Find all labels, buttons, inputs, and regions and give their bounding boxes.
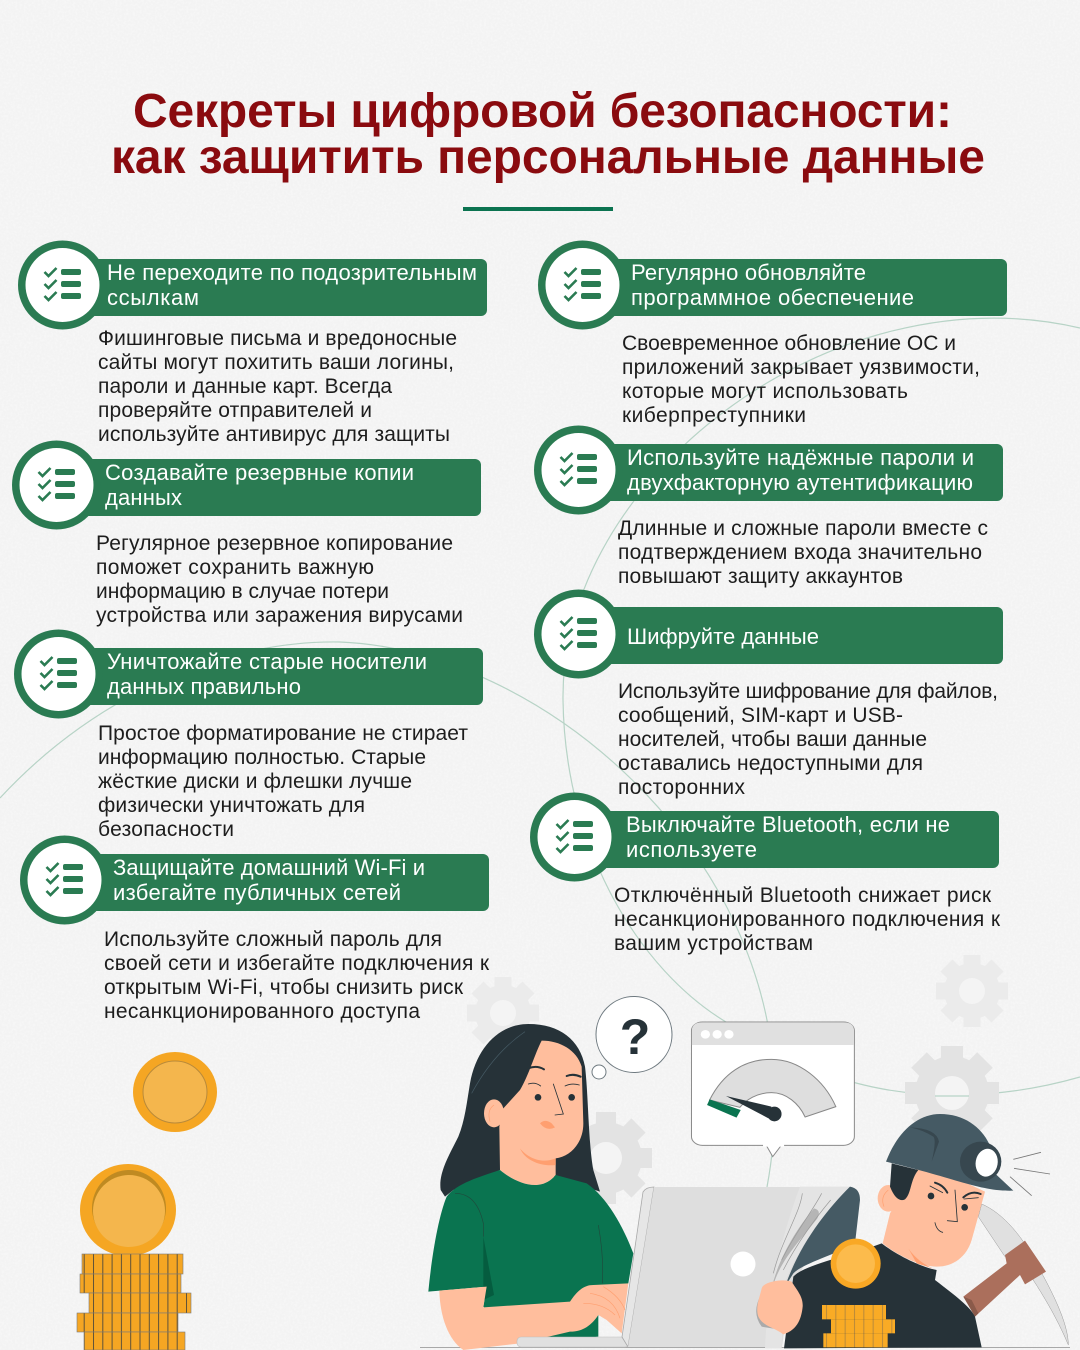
heading: Регулярно обновляйте — [631, 260, 866, 285]
body text — [98, 327, 457, 446]
body text: сообщений, SIM-карт и USB- — [618, 704, 903, 727]
body text: Простое форматирование не стирает — [98, 722, 468, 745]
body text: приложений закрывает уязвимости, — [622, 356, 980, 379]
icon: checklist — [18, 240, 107, 330]
heading — [113, 855, 425, 905]
panel: home Wi-Fi — [20, 836, 490, 1023]
heading: данных правильно — [107, 674, 301, 699]
body text: своей сети и избегайте подключения к — [104, 952, 490, 975]
body text: информацию в случае потери — [96, 580, 389, 603]
heading — [631, 260, 914, 310]
title: Секреты цифровой безопасности: — [133, 85, 952, 138]
icon: checklist — [12, 440, 101, 530]
heading — [627, 445, 974, 495]
illustration: miner — [756, 1114, 1068, 1348]
head — [878, 1163, 985, 1269]
heading: ссылкам — [107, 285, 199, 310]
torso — [784, 1243, 982, 1348]
coin stack — [77, 1254, 191, 1350]
icon: checklist — [20, 836, 109, 924]
body text: посторонних — [618, 776, 746, 799]
heading: данных — [105, 485, 182, 510]
heading: двухфакторную аутентификацию — [627, 470, 973, 495]
header bar — [56, 648, 483, 705]
body text: проверяйте отправителей и — [98, 399, 372, 422]
heading: избегайте публичных сетей — [113, 880, 401, 905]
body text — [622, 332, 980, 427]
panel: suspicious links — [18, 240, 487, 446]
panel: backups — [12, 440, 481, 627]
body text: Длинные и сложные пароли вместе с — [618, 517, 988, 540]
header bar — [54, 459, 481, 516]
panel: destroy old media — [14, 630, 483, 841]
body text: носителей, чтобы ваши данные — [618, 728, 927, 751]
coin on miner — [831, 1239, 881, 1289]
body text: оставались недоступными для — [618, 752, 923, 775]
heading: Уничтожайте старые носители — [107, 649, 427, 674]
icon: falling coin — [133, 1052, 217, 1132]
body text — [96, 532, 463, 627]
heading: Шифруйте данные — [627, 624, 819, 649]
helmet and lamp — [886, 1114, 1050, 1196]
body text: открытым Wi-Fi, чтобы снизить риск — [104, 976, 464, 999]
body text: Отключённый Bluetooth снижает риск — [614, 884, 992, 907]
body text: несанкционированного подключения к — [614, 908, 1001, 931]
heading: используете — [626, 837, 757, 862]
header bar — [60, 259, 487, 316]
body text: используйте антивирус для защиты — [98, 423, 450, 446]
header bar — [576, 607, 1003, 664]
heading: Защищайте домашний Wi-Fi и — [113, 855, 425, 880]
body text: киберпреступники — [622, 404, 806, 427]
heading — [626, 812, 950, 862]
icon: checklist — [14, 630, 103, 718]
title: как защитить персональные данные — [111, 131, 985, 184]
icon: checklist — [534, 426, 623, 514]
panel: Bluetooth — [530, 792, 1001, 955]
title — [111, 85, 985, 184]
icon: checklist — [538, 240, 627, 330]
body text — [618, 680, 998, 799]
heading: программное обеспечение — [631, 285, 914, 310]
illustration: woman — [428, 1024, 633, 1350]
body text: которые могут использовать — [622, 380, 908, 403]
body text: жёсткие диски и флешки лучше — [98, 770, 412, 793]
panel: encryption — [534, 590, 1003, 799]
body text: устройства или заражения вирусами — [96, 604, 463, 627]
body text: сайты могут похитить ваши логины, — [98, 351, 454, 374]
body text: Используйте шифрование для файлов, — [618, 680, 998, 703]
laptop flap — [765, 1187, 860, 1348]
coin stack on miner — [822, 1305, 895, 1347]
body text: Регулярное резервное копирование — [96, 532, 453, 555]
body text: вашим устройствам — [614, 932, 813, 955]
icon: checklist — [534, 590, 623, 678]
body text: Фишинговые письма и вредоносные — [98, 327, 457, 350]
body text — [98, 722, 468, 841]
question mark: ? — [620, 1009, 650, 1065]
heading: Создавайте резервные копии — [105, 460, 414, 485]
heading: Выключайте Bluetooth, если не — [626, 812, 950, 837]
header bar — [62, 854, 489, 911]
body text — [618, 517, 988, 588]
body text: Используйте сложный пароль для — [104, 928, 442, 951]
body text: поможет сохранить важную — [96, 556, 374, 579]
title underline — [463, 207, 613, 211]
body text: физически уничтожать для — [98, 794, 365, 817]
panel: software updates — [538, 240, 1007, 427]
laptop — [517, 1187, 850, 1347]
body text: пароли и данные карт. Всегда — [98, 375, 392, 398]
ground line — [420, 1347, 1070, 1348]
pickaxe — [963, 1204, 1068, 1345]
hand — [756, 1280, 803, 1334]
browser window with gauge — [691, 1022, 854, 1157]
body text: подтверждением входа значительно — [618, 541, 982, 564]
body text — [614, 884, 1001, 955]
icon: background gears — [467, 955, 1008, 1204]
heading — [107, 649, 427, 699]
heading — [107, 260, 477, 310]
body text: Своевременное обновление ОС и — [622, 332, 956, 355]
icon: checklist — [530, 792, 619, 882]
heading: Используйте надёжные пароли и — [627, 445, 974, 470]
body text — [104, 928, 490, 1023]
header bar — [576, 444, 1003, 501]
panel: strong passwords — [534, 426, 1003, 588]
thought bubble — [592, 996, 672, 1079]
heading: Не переходите по подозрительным — [107, 260, 477, 285]
body text: несанкционированного доступа — [104, 1000, 420, 1023]
heading — [105, 460, 414, 510]
header bar — [580, 259, 1007, 316]
icon: coin on stack — [80, 1164, 176, 1256]
header bar — [572, 811, 999, 868]
body text: информацию полностью. Старые — [98, 746, 426, 769]
body text: повышают защиту аккаунтов — [618, 565, 903, 588]
body text: безопасности — [98, 818, 234, 841]
